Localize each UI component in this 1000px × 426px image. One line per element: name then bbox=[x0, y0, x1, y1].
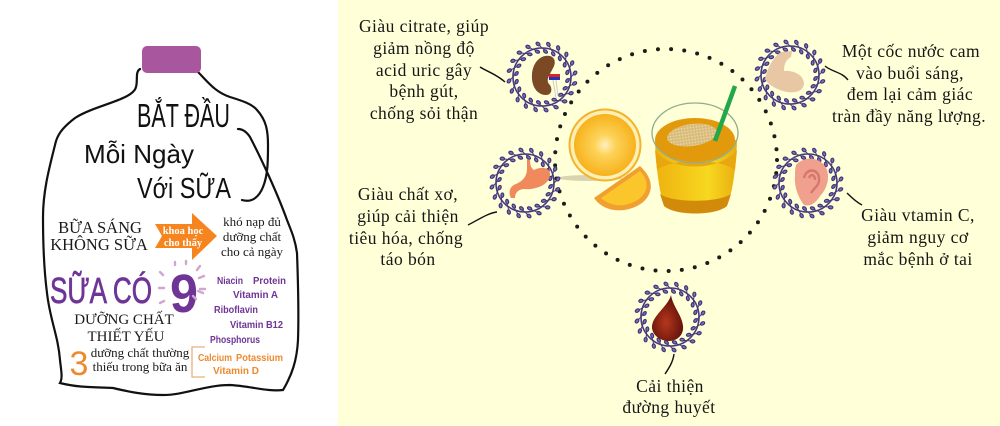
text: kidney benefit bbox=[359, 16, 489, 123]
text: stomach benefit: táo bón bbox=[380, 249, 436, 269]
text: stomach benefit bbox=[349, 184, 463, 269]
arrow: science shows: khoa học bbox=[163, 226, 204, 237]
text: kidney benefit: bệnh gút, bbox=[389, 81, 459, 101]
icon: kidney bbox=[506, 41, 578, 113]
heading: milk has 9: 9 bbox=[170, 264, 198, 324]
text: kidney benefit: chống sỏi thận bbox=[370, 103, 478, 123]
text: hard to get enough nutrients: dưỡng chất bbox=[223, 229, 282, 244]
text: stomach benefit: tiêu hóa, chống bbox=[349, 228, 463, 248]
text: energy benefit: tràn đầy năng lượng. bbox=[832, 106, 986, 126]
text: breakfast without milk: BỮA SÁNG bbox=[58, 218, 142, 237]
bottle cap bbox=[142, 46, 201, 73]
text: energy benefit bbox=[832, 41, 986, 126]
icon: blood drop bbox=[634, 281, 706, 353]
list: nine nutrients: Protein bbox=[253, 275, 286, 287]
list: nine nutrients: Vitamin A bbox=[233, 289, 278, 301]
panel: milk bottle bbox=[43, 46, 298, 395]
icon: muscle arm bbox=[754, 39, 826, 111]
list: nine nutrients: Vitamin B12 bbox=[230, 319, 283, 331]
text: breakfast without milk bbox=[50, 218, 148, 254]
text: kidney benefit: Giàu citrate, giúp bbox=[359, 16, 489, 36]
text: kidney benefit: acid uric gây bbox=[376, 60, 472, 80]
text: ear benefit bbox=[861, 205, 975, 269]
bottle outline bbox=[43, 69, 298, 395]
bracket and list: lacking nutrients: Potassium bbox=[236, 352, 283, 364]
icon: ear bbox=[772, 147, 844, 219]
list: nine nutrients: Riboflavin bbox=[214, 304, 258, 316]
text: blood benefit: Cải thiện bbox=[636, 376, 704, 396]
text: blood benefit: đường huyết bbox=[622, 397, 716, 417]
dotted circle bbox=[555, 49, 777, 271]
heading: start each day with milk: BẮT ĐẦU bbox=[137, 97, 230, 134]
heading: start each day with milk: Mỗi Ngày bbox=[84, 139, 194, 169]
illustration: orange slices bbox=[558, 108, 651, 210]
text: ear benefit: giảm nguy cơ bbox=[867, 227, 969, 247]
text: kidney benefit: giảm nồng độ bbox=[373, 38, 475, 58]
text: hard to get enough nutrients bbox=[221, 214, 284, 259]
connector: ear bbox=[847, 193, 862, 205]
text: essential nutrients bbox=[74, 311, 174, 345]
list: nine nutrients: Niacin bbox=[217, 275, 243, 287]
bracket and list: lacking nutrients bbox=[192, 347, 283, 377]
heading: milk has 9 bbox=[50, 261, 205, 324]
icon: stomach bbox=[489, 147, 561, 219]
arrow: science shows: cho thấy bbox=[164, 238, 203, 249]
text: breakfast without milk: KHÔNG SỮA bbox=[50, 235, 148, 254]
arrow: science shows bbox=[155, 213, 217, 260]
bracket and list: lacking nutrients: Vitamin D bbox=[213, 365, 259, 377]
panel: juice benefits background bbox=[338, 0, 1000, 426]
connector: muscle bbox=[825, 66, 848, 80]
heading: start each day with milk: Với SỮA bbox=[137, 171, 232, 205]
text: hard to get enough nutrients: khó nạp đủ bbox=[223, 214, 281, 229]
connector: stomach bbox=[468, 212, 497, 225]
text: hard to get enough nutrients: cho cả ngày bbox=[221, 244, 284, 259]
text: three nutrients often lacking: 3 bbox=[70, 345, 88, 383]
text: ear benefit: mắc bệnh ở tai bbox=[863, 249, 973, 269]
list: nine nutrients: Phosphorus bbox=[210, 334, 260, 346]
text: stomach benefit: giúp cải thiện bbox=[357, 206, 459, 226]
connector: kidney bbox=[480, 67, 505, 82]
text: three nutrients often lacking: thiếu trong bữa ăn bbox=[93, 359, 188, 374]
list: nine nutrients bbox=[210, 275, 286, 346]
bracket and list: lacking nutrients: Calcium bbox=[198, 352, 232, 364]
text: energy benefit: Một cốc nước cam bbox=[842, 41, 980, 61]
text: essential nutrients: THIẾT YẾU bbox=[87, 328, 165, 345]
text: three nutrients often lacking bbox=[70, 345, 190, 383]
text: energy benefit: đem lại cảm giác bbox=[847, 84, 973, 104]
heading: start each day with milk bbox=[84, 97, 232, 205]
text: essential nutrients: DƯỠNG CHẤT bbox=[74, 311, 174, 328]
text: blood benefit bbox=[622, 376, 716, 417]
heading: milk has 9: SỮA CÓ bbox=[50, 270, 152, 311]
connector: blood bbox=[665, 354, 674, 374]
text: ear benefit: Giàu vtamin C, bbox=[861, 205, 975, 225]
text: three nutrients often lacking: dưỡng chất thường bbox=[91, 345, 190, 360]
illustration: glass of juice bbox=[652, 86, 738, 214]
text: energy benefit: vào buổi sáng, bbox=[856, 63, 964, 83]
text: stomach benefit: Giàu chất xơ, bbox=[358, 184, 458, 204]
